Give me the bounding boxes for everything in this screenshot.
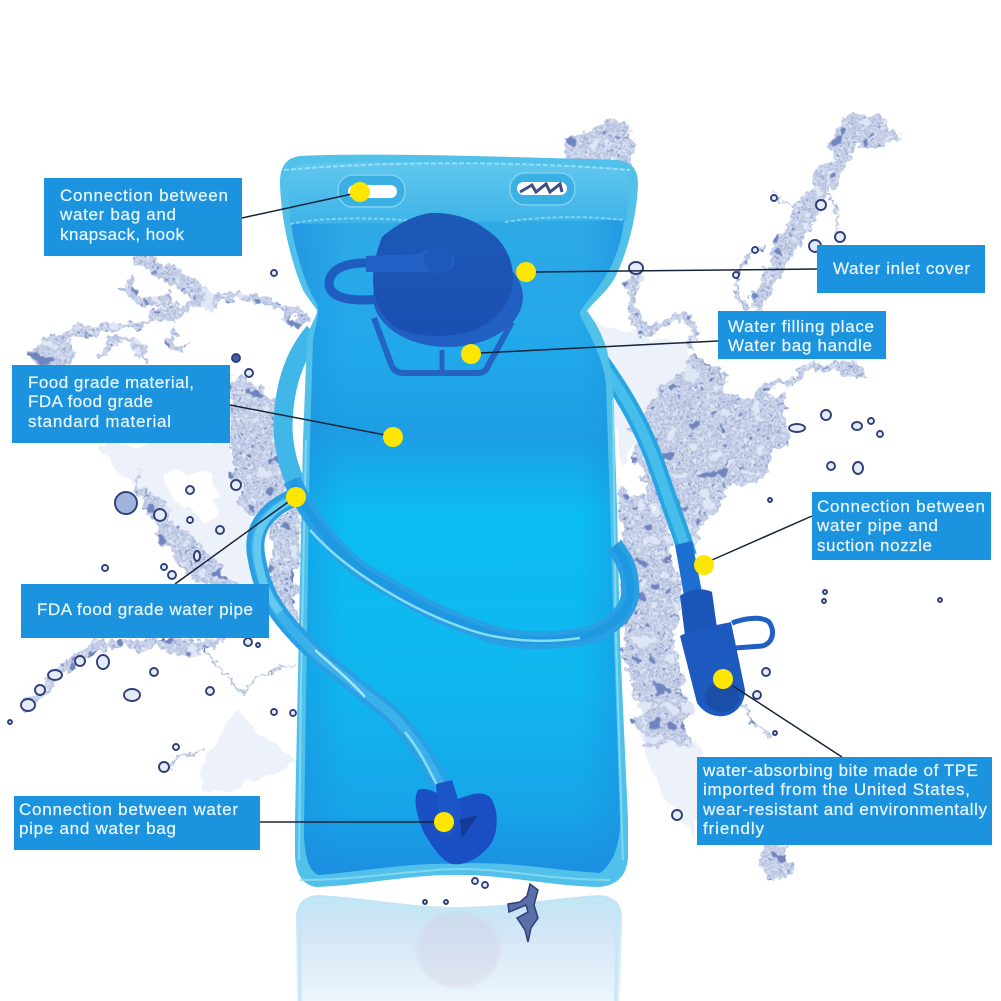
callout: hook connection <box>44 178 242 256</box>
callout: food grade material <box>12 365 230 443</box>
callout: pipe and bag connection: Connection between water <box>19 800 238 819</box>
water splash: textured body <box>28 110 898 878</box>
callout: hook connection: knapsack, hook <box>60 225 184 244</box>
bag side shading <box>291 220 624 875</box>
water pipe: left section behind bag <box>283 332 314 485</box>
callout: water pipe <box>21 584 269 638</box>
water pipe: main loop over bag <box>255 480 630 795</box>
callout: food grade material: Food grade material, <box>28 373 194 392</box>
callout: filling place and handle: Water filling place <box>728 317 874 336</box>
splash: upper left branch <box>33 258 305 367</box>
callout: food grade material: FDA food grade <box>28 392 153 411</box>
callout: pipe and bag connection <box>14 796 260 850</box>
callout: bite valve: wear-resistant and environmentally <box>702 800 988 819</box>
callout: food grade material: standard material <box>28 412 171 431</box>
splash: upper right stream <box>740 110 898 315</box>
splash: lower left arm <box>28 640 292 765</box>
splash: lower right blobs <box>735 690 791 878</box>
tether loop <box>329 263 385 300</box>
pipe section two <box>255 497 445 795</box>
water splash: pale sheets <box>100 318 700 840</box>
callout: bite valve <box>697 757 992 845</box>
nozzle body <box>680 622 745 716</box>
callout: pipe and nozzle connection: suction nozzle <box>817 536 932 555</box>
marker dots <box>286 182 733 832</box>
splash: right arm and mass <box>618 268 866 745</box>
leader lines <box>175 194 842 822</box>
handle frame <box>374 318 512 373</box>
callout: pipe and bag connection: pipe and water bag <box>19 819 176 838</box>
bottom connector to bag <box>416 780 497 864</box>
cap lid <box>373 213 513 336</box>
callout: hook connection: Connection between <box>60 186 228 205</box>
callout: bite valve: imported from the United States, <box>703 780 970 799</box>
bag inner panel <box>291 220 624 875</box>
bag seam highlights <box>284 163 630 880</box>
bag top band <box>288 163 630 224</box>
suction nozzle <box>675 541 773 716</box>
water droplets <box>8 195 942 1001</box>
reflection of the bag <box>296 895 622 1001</box>
callout: pipe and nozzle connection: Connection between <box>817 497 985 516</box>
bite valve tip <box>705 682 739 712</box>
callout: hook connection: water bag and <box>59 205 176 224</box>
bag rim <box>280 155 638 887</box>
callout: pipe and nozzle connection <box>812 492 991 560</box>
callout: filling place and handle <box>718 311 886 359</box>
splash below the bag <box>508 884 538 942</box>
tether strap on lid <box>366 248 454 272</box>
nozzle loop handle <box>732 618 773 648</box>
water inlet cap assembly <box>329 213 523 373</box>
splash: top behind bag <box>556 122 636 170</box>
water bag body <box>280 155 638 887</box>
callout: water inlet cover: Water inlet cover <box>833 259 970 278</box>
water pipe: right section behind bag <box>596 355 688 556</box>
callout: pipe and nozzle connection: water pipe and <box>816 516 938 535</box>
callout: water pipe: FDA food grade water pipe <box>37 600 253 619</box>
callout: filling place and handle: Water bag handle <box>728 336 872 355</box>
splash: left middle mass <box>130 380 300 625</box>
callout: bite valve: friendly <box>703 819 764 838</box>
pipe section one <box>292 480 630 641</box>
nozzle collar <box>680 589 717 636</box>
nozzle connector <box>675 541 702 596</box>
callout: bite valve: water-absorbing bite made of TPE <box>702 761 978 780</box>
hanging slot right <box>510 173 575 205</box>
lid knob <box>424 246 452 274</box>
filling ring <box>373 247 523 347</box>
hanging slot left <box>338 175 405 207</box>
callout: water inlet cover <box>817 245 985 293</box>
